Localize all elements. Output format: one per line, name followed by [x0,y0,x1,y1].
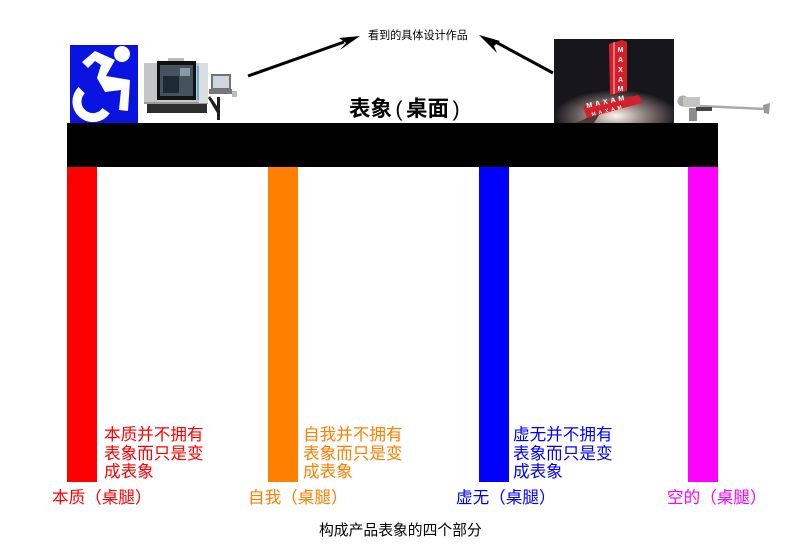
image: Maxam red packaging photo: M [618,86,624,93]
text: essence note: 表象而只是变 [104,444,204,462]
icon: accessible wheelchair symbol [70,45,138,123]
text: nothingness note [513,425,613,481]
text: self note [303,425,403,481]
arrow: left image to caption [248,36,360,78]
image: Maxam red packaging photo [554,39,674,123]
text: self note: 表象而只是变 [303,444,403,462]
arrow: right image to caption [479,35,554,74]
image: Maxam red packaging photo: M [618,47,624,54]
text: essence note: 本质并不拥有 [104,425,204,444]
caption: visible concrete design works: 看到的具体设计作品 [368,30,468,42]
heading: appearance (table top): ) [452,97,460,121]
label: essence leg: 本质（桌腿） [52,488,152,507]
image: Maxam red packaging photo: A [618,57,623,64]
heading: appearance (table top): ( [395,97,403,121]
image: CNC machine [144,58,237,120]
text: self note: 自我并不拥有 [303,425,403,444]
text: essence note: 成表象 [104,462,154,481]
text: essence note [104,425,204,481]
text: nothingness note: 成表象 [513,462,563,481]
text: self note: 成表象 [303,462,353,481]
image: Maxam red packaging photo: MAXAM [591,104,625,118]
table leg: essence [67,167,97,482]
table leg: nothingness [479,167,509,482]
figure caption: 构成产品表象的四个部分 [319,523,482,539]
text: nothingness note: 虚无并不拥有 [513,425,613,444]
image: Maxam red packaging photo: X [618,67,623,74]
table top bar [67,123,718,167]
label: self leg: 自我（桌腿） [248,488,348,507]
label: nothingness leg: 虚无（桌腿） [456,488,556,507]
heading: appearance (table top): 表象 桌面 [349,97,449,121]
table leg: self [268,167,298,482]
image: Maxam red packaging photo: A [618,77,623,84]
image: Maxam red packaging photo: MAXAM [586,94,628,110]
text: nothingness note: 表象而只是变 [513,444,613,462]
image: turntable tonearm [678,96,770,121]
table leg: emptiness [688,167,718,482]
label: emptiness leg: 空的（桌腿） [667,488,767,507]
